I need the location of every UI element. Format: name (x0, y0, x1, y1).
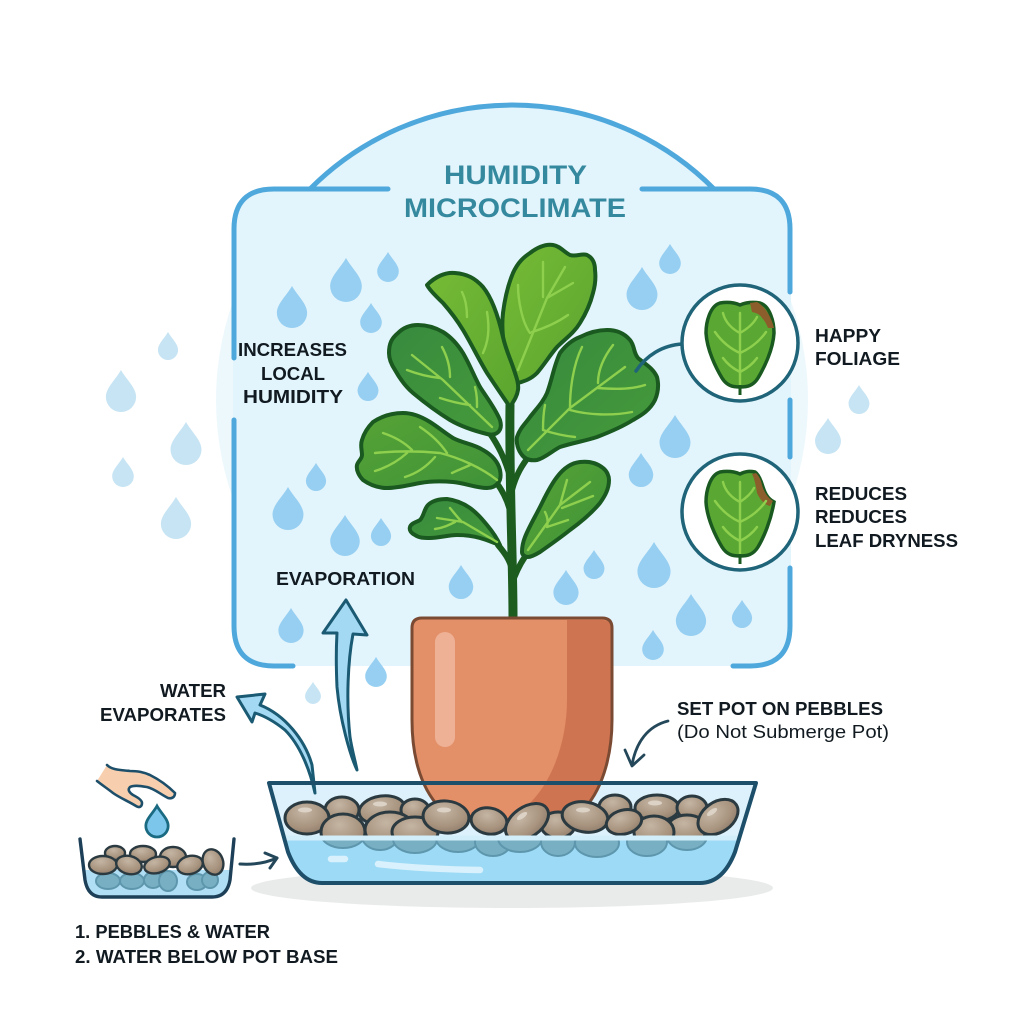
label: water evaporates (100, 681, 226, 725)
leaf: lower right (522, 462, 609, 557)
title: MICROCLIMATE (404, 193, 626, 223)
tray water (284, 836, 740, 883)
water droplets outside dome (106, 332, 869, 704)
label: steps (75, 922, 338, 967)
label: water evaporates: EVAPORATES (100, 705, 226, 725)
label: increases local humidity: INCREASES (238, 340, 347, 360)
arrow: evaporation (323, 600, 367, 770)
submerged pebbles (322, 840, 707, 858)
label: evaporation: EVAPORATION (276, 569, 415, 589)
arrow: bowl to tray (240, 853, 277, 868)
leaf: upper left (427, 273, 518, 407)
terracotta pot (412, 618, 612, 820)
label: water evaporates: WATER (160, 681, 226, 701)
label: reduces leaf dryness: REDUCES (815, 484, 907, 504)
label: increases local humidity: HUMIDITY (243, 387, 343, 407)
detail circle: reduced dryness (682, 454, 798, 570)
label: happy foliage: FOLIAGE (815, 349, 900, 369)
leaf: mid left (389, 325, 501, 435)
plant leaves (357, 245, 658, 557)
microclimate dome outline (234, 105, 790, 666)
plant stem (489, 405, 530, 617)
icon: water drop from hand (146, 806, 168, 837)
label: increases local humidity (238, 340, 347, 407)
tray glass back (269, 783, 756, 883)
tray pebbles (284, 794, 740, 836)
leaf: lower left large (357, 413, 501, 488)
detail circle: happy foliage (682, 285, 798, 401)
arrow: set pot on pebbles (625, 721, 668, 766)
title: HUMIDITY (444, 160, 587, 190)
label: happy foliage (815, 326, 900, 369)
leaf: mid right (517, 330, 658, 460)
label: set pot on pebbles (677, 699, 889, 742)
ground shadow (251, 868, 773, 908)
water droplets inside dome (273, 244, 752, 687)
label: reduces leaf dryness: REDUCES (815, 507, 907, 527)
label: steps: 2. WATER BELOW POT BASE (75, 947, 338, 967)
label: happy foliage: HAPPY (815, 326, 881, 346)
title (404, 160, 626, 223)
connector to leaf detail (636, 344, 683, 371)
label: set pot on pebbles: (Do Not Submerge Pot) (677, 722, 889, 742)
tray outline (269, 783, 756, 883)
label: steps: 1. PEBBLES & WATER (75, 922, 270, 942)
small bowl with pebbles (80, 839, 234, 897)
arrow: water evaporates (237, 694, 315, 793)
label: reduces leaf dryness (815, 484, 958, 551)
microclimate background (216, 104, 808, 696)
label: increases local humidity: LOCAL (261, 364, 325, 384)
label: reduces leaf dryness: LEAF DRYNESS (815, 531, 958, 551)
label: set pot on pebbles: SET POT ON PEBBLES (677, 699, 883, 719)
hand (97, 765, 175, 807)
leaf: upper right (502, 245, 595, 383)
leaf: lower left small (410, 499, 500, 545)
